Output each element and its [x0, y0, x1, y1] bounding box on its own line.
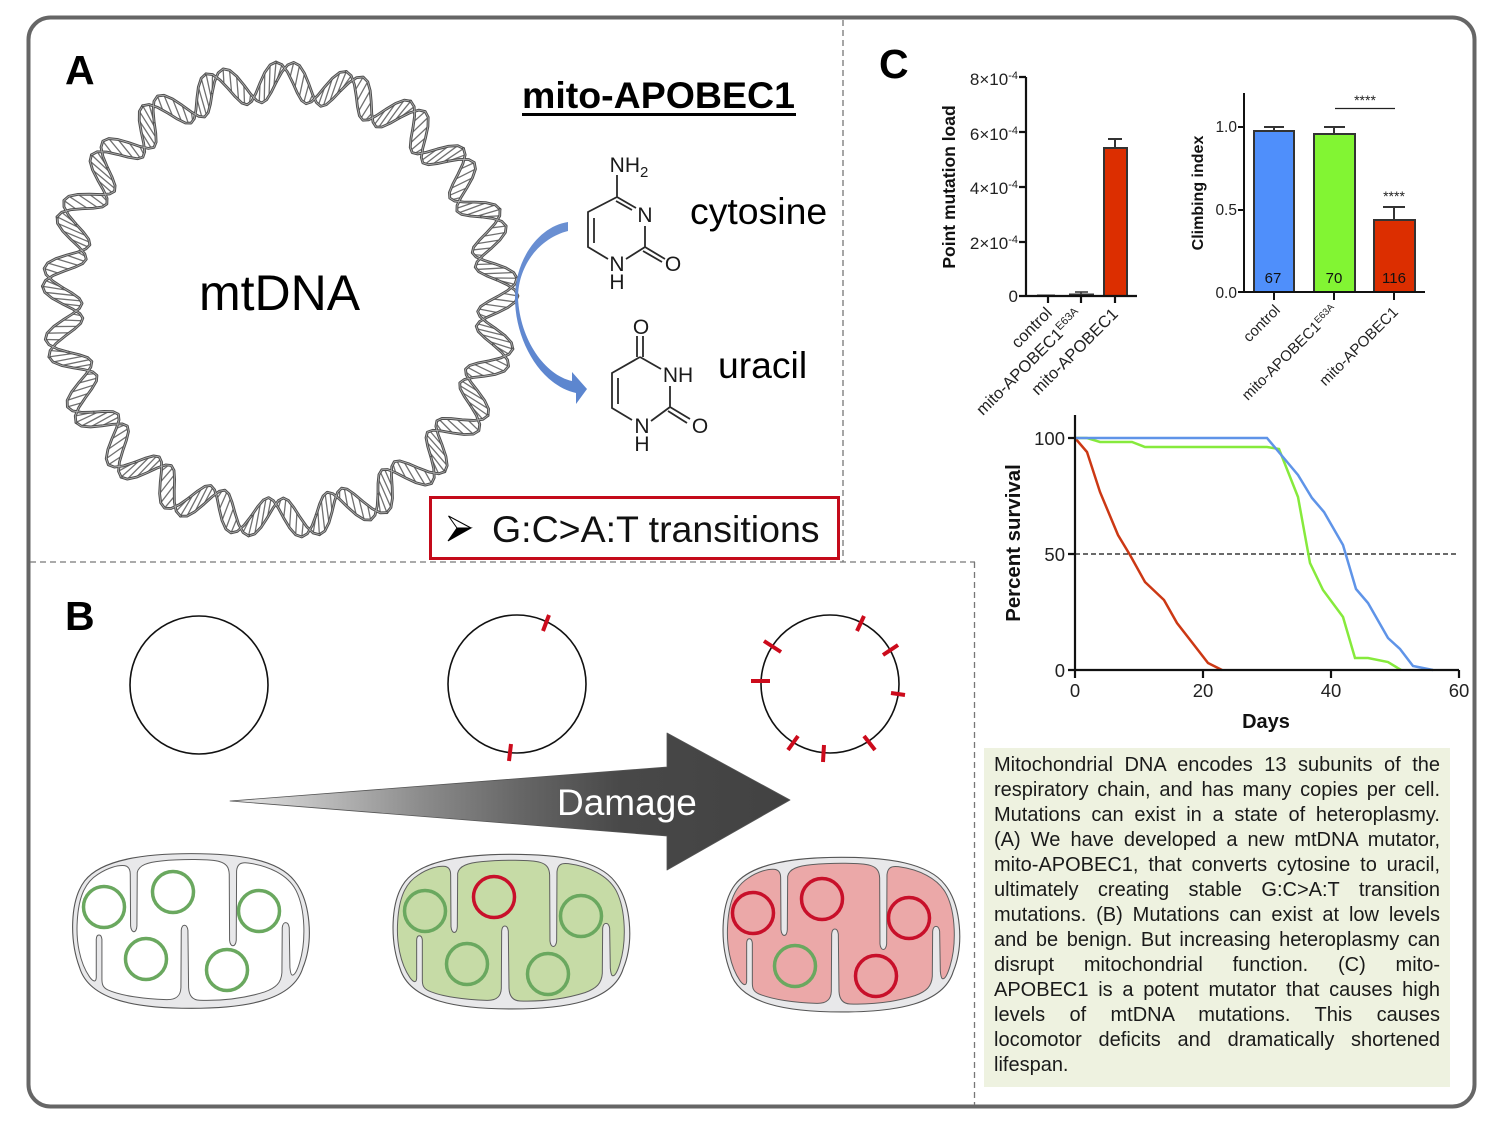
mtDNA helix ring	[40, 60, 519, 538]
summary text block: locomotor deficits and dramatically shortened	[994, 1029, 1440, 1051]
cytosine molecule: 2	[640, 164, 648, 181]
panel letter C: C	[879, 41, 909, 87]
bar chart: point mutation load	[939, 70, 1137, 419]
uracil molecule: N	[634, 415, 650, 438]
survival line chart	[1003, 415, 1469, 733]
summary text block: respiratory chain, and has many copies per cell.	[994, 779, 1440, 801]
y axis labels: 0	[1009, 287, 1018, 306]
y axis labels	[1215, 119, 1237, 302]
significance markers: ****	[1354, 92, 1376, 108]
intact mtDNA circle	[130, 616, 268, 754]
blue survival curve	[1075, 438, 1433, 670]
y axis labels: 100	[1034, 428, 1065, 449]
panel B: heteroplasmy and damage	[65, 593, 960, 1012]
mitochondrion with low heteroplasmy	[393, 854, 630, 1009]
y axis title: Climbing index	[1190, 136, 1207, 250]
y axis labels: -4	[1008, 234, 1018, 246]
uracil label: uracil	[718, 344, 807, 386]
healthy mitochondrion	[73, 854, 309, 1008]
cytosine molecule: N	[637, 204, 653, 227]
uracil molecule: NH	[663, 364, 693, 387]
callout: G:C>A:T transitions: G:C>A:T transitions	[492, 508, 820, 550]
y axis labels: 0.0	[1215, 285, 1237, 302]
mitochondrion with high heteroplasmy	[723, 857, 960, 1012]
x axis labels: 0	[1070, 680, 1080, 701]
mtDNA circle with many mutations	[751, 615, 905, 762]
summary text block: (A) We have developed a new mtDNA mutator,	[994, 829, 1440, 851]
summary text block: levels of mtDNA mutations. This causes	[994, 1004, 1440, 1026]
y axis labels: 1.0	[1215, 119, 1237, 136]
damage arrow	[230, 733, 790, 870]
bar chart: climbing index	[1190, 92, 1425, 404]
panel C: phenotype charts	[879, 41, 1469, 733]
x axis labels: control	[1240, 302, 1284, 346]
y axis labels: -4	[1008, 179, 1018, 191]
panel letter A: A	[65, 47, 95, 93]
summary text block: Mutations can exist in a state of heteroplasmy.	[994, 804, 1440, 826]
x axis labels: mito-APOBEC1	[1028, 305, 1122, 399]
uracil molecule	[612, 316, 708, 456]
y axis labels: -4	[1008, 70, 1018, 82]
x axis title: Days	[1242, 711, 1290, 733]
summary text block: disrupt mitochondrial function. (C) mito-	[994, 954, 1440, 976]
heading: mito-APOBEC1: mito-APOBEC1	[522, 74, 795, 116]
damage arrow: Damage	[557, 782, 697, 823]
y axis labels: 6×10	[970, 125, 1008, 144]
bars	[1037, 139, 1127, 296]
y axis labels	[1034, 428, 1065, 681]
summary text block: lifespan.	[994, 1054, 1068, 1076]
summary text block	[984, 748, 1450, 1087]
y axis labels: 2×10	[970, 234, 1008, 253]
green survival curve	[1075, 438, 1401, 670]
cytosine molecule: H	[609, 271, 625, 294]
bars with counts: 116	[1382, 270, 1406, 287]
cytosine molecule	[588, 154, 681, 294]
bars with counts	[1254, 127, 1415, 292]
y axis labels: 4×10	[970, 179, 1008, 198]
y axis labels	[970, 70, 1018, 306]
panel letter B: B	[65, 593, 95, 639]
bars with counts: 70	[1326, 270, 1342, 287]
uracil molecule: O	[692, 415, 708, 438]
x axis labels: E63A	[1312, 301, 1337, 326]
summary text block: and be benign. But increasing heteroplasmy can	[994, 929, 1440, 951]
x axis labels: E63A	[1053, 305, 1081, 333]
significance markers: ****	[1383, 188, 1405, 204]
x axis labels: 40	[1321, 680, 1341, 701]
x axis labels: control	[1008, 304, 1056, 352]
mtDNA label: mtDNA	[199, 265, 361, 321]
red survival curve	[1075, 438, 1222, 670]
y axis title: Percent survival	[1003, 464, 1025, 622]
x axis labels: 60	[1449, 680, 1469, 701]
curved conversion arrow	[515, 222, 587, 404]
cytosine molecule: O	[665, 253, 681, 276]
y axis labels: 8×10	[970, 70, 1008, 89]
x axis labels	[972, 304, 1122, 419]
cytosine molecule: NH	[610, 154, 640, 177]
x axis labels: mito-APOBEC1	[1239, 318, 1324, 404]
y axis title: Point mutation load	[939, 105, 959, 269]
summary text block: ultimately creating stable G:C>A:T transition	[994, 879, 1440, 901]
x axis labels	[1239, 301, 1402, 404]
callout: G:C>A:T transitions	[430, 498, 838, 558]
mtDNA circle with few mutations	[448, 615, 586, 761]
summary text block: Mitochondrial DNA encodes 13 subunits of the	[994, 754, 1440, 776]
bars with counts: 67	[1265, 270, 1281, 287]
y axis labels: 0	[1055, 660, 1065, 681]
cytosine molecule: N	[609, 253, 625, 276]
x axis labels: mito-APOBEC1	[973, 325, 1067, 419]
x axis labels	[1070, 680, 1469, 701]
y axis labels: -4	[1008, 125, 1018, 137]
y axis labels: 0.5	[1215, 202, 1237, 219]
summary text block: APOBEC1 is a potent mutator that causes high	[994, 979, 1440, 1001]
cytosine label: cytosine	[690, 190, 827, 232]
uracil molecule: H	[634, 433, 650, 456]
significance markers	[1335, 92, 1405, 204]
panel A: mtDNA and mito-APOBEC1	[40, 47, 838, 558]
uracil molecule: O	[633, 316, 649, 339]
y axis labels: 50	[1044, 544, 1065, 565]
summary text block: mito-APOBEC1, that converts cytosine to uracil,	[994, 854, 1440, 876]
x axis labels: 20	[1193, 680, 1213, 701]
summary text block: mutations. (B) Mutations can exist at low levels	[994, 904, 1440, 926]
x axis labels: mito-APOBEC1	[1316, 304, 1402, 390]
